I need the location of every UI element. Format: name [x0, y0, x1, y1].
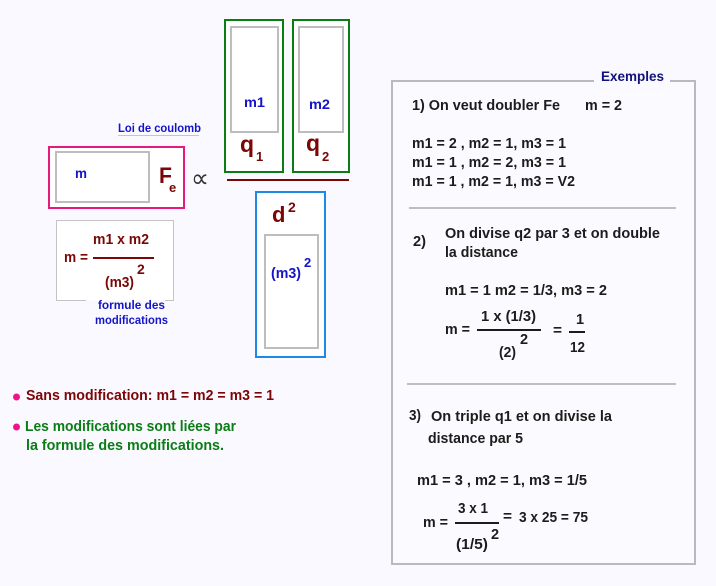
panel: modification formula: (m3) — [105, 274, 134, 291]
example 2 — [413, 226, 660, 361]
panel: force box: F — [159, 163, 172, 188]
example 1 — [412, 98, 622, 190]
example 2: = — [553, 323, 562, 339]
panel: q1 charge box: m1 — [244, 94, 265, 110]
heading: Loi de coulomb: Loi de coulomb — [118, 123, 201, 135]
example 2: 12 — [570, 340, 585, 356]
panel: q2 charge box — [293, 20, 349, 172]
panel: distance box — [256, 192, 325, 357]
example 1: 1) On veut doubler Fe — [412, 98, 560, 114]
example 3: m = — [423, 515, 448, 531]
example 2: (2) — [499, 345, 516, 361]
panel: force box: m — [75, 166, 87, 181]
fraction bar — [227, 179, 349, 181]
panel: modification formula: m1 x m2 — [93, 232, 149, 248]
panel: q1 charge box: q — [240, 131, 254, 157]
panel: modification formula: 2 — [137, 261, 145, 277]
example 2: 2) — [413, 234, 426, 250]
example 1: m1 = 1 , m2 = 2, m3 = 1 — [412, 155, 566, 171]
example 3: m1 = 3 , m2 = 1, m3 = 1/5 — [417, 473, 587, 489]
example 3: 3) — [409, 408, 421, 424]
example 3: 3 x 1 — [458, 501, 488, 517]
example 2: On divise q2 par 3 et on double — [445, 226, 660, 242]
panel: distance box: (m3) — [271, 265, 301, 282]
proportional symbol: ∝ — [191, 164, 209, 194]
example 3: distance par 5 — [428, 431, 523, 447]
example 2: 2 — [520, 332, 528, 348]
panel: force box — [49, 147, 184, 208]
example 3: On triple q1 et on divise la — [431, 409, 613, 425]
panel: distance box: 2 — [288, 199, 296, 215]
example 3 — [409, 408, 613, 553]
example 1: m1 = 2 , m2 = 1, m3 = 1 — [412, 136, 566, 152]
panel: force box: e — [169, 180, 176, 195]
bullet: modifications liées: Les modifications sont liées par — [25, 419, 236, 435]
bullet: sans modification: Sans modification: m1 = m2 = m3 = 1 — [26, 388, 274, 404]
panel: q2 charge box: q — [306, 130, 320, 156]
example 2: m1 = 1 m2 = 1/3, m3 = 2 — [445, 283, 607, 299]
panel: q1 charge box: 1 — [256, 149, 263, 164]
panel: modification formula — [56, 220, 174, 300]
example 2: 1 x (1/3) — [481, 309, 536, 325]
panel: distance box: 2 — [304, 255, 311, 270]
panel: q2 charge box: 2 — [322, 149, 329, 164]
caption: formule des modifications — [95, 298, 168, 327]
example 2: 1 — [576, 312, 584, 328]
example 3: = — [503, 509, 512, 525]
bullet: modifications liées: la formule des modifications. — [26, 438, 224, 454]
bullet: modifications liées — [13, 419, 236, 454]
example 1: m = 2 — [585, 98, 622, 114]
caption: formule des modifications: formule des — [98, 298, 165, 312]
example 2: la distance — [445, 245, 518, 261]
example 3: (1/5) — [456, 537, 488, 553]
panel: q1 charge box — [225, 20, 283, 172]
example 3: 2 — [491, 527, 499, 543]
panel: distance box: d — [272, 202, 285, 227]
heading: Exemples: Exemples — [601, 69, 664, 84]
example 3: 3 x 25 = 75 — [519, 510, 588, 526]
caption: formule des modifications: modifications — [95, 313, 168, 327]
panel: exemples — [392, 69, 695, 564]
panel: q2 charge box: m2 — [309, 96, 330, 112]
example 1: m1 = 1 , m2 = 1, m3 = V2 — [412, 174, 575, 190]
panel: modification formula: m = — [64, 249, 88, 266]
example 2: m = — [445, 322, 470, 338]
